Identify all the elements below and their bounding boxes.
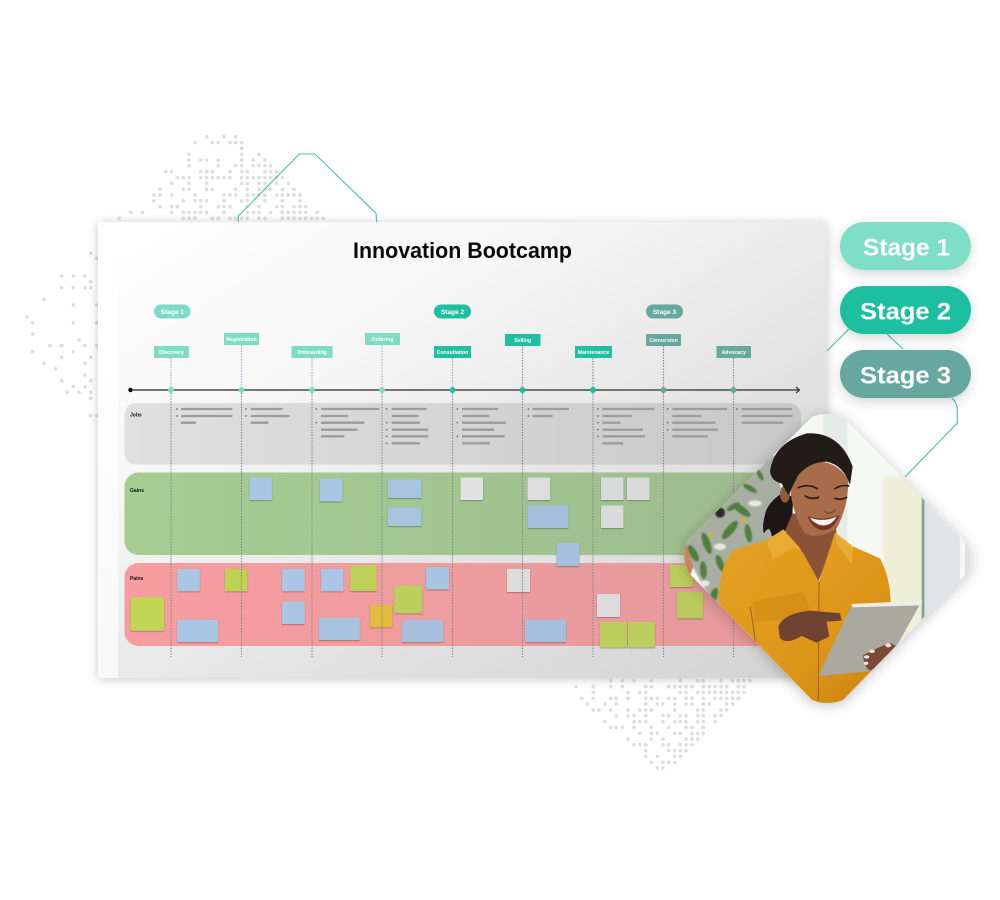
journey step labels: Onboarding xyxy=(297,350,327,356)
row: Gains xyxy=(124,472,784,555)
pill: Stage 3 xyxy=(840,350,971,398)
small stage pills xyxy=(154,304,683,318)
shirt xyxy=(718,529,897,703)
row: Pains: Pains xyxy=(130,576,144,582)
timeline drop lines xyxy=(171,345,734,657)
journey step labels: Discovery xyxy=(159,350,184,356)
dot pattern: left xyxy=(27,253,97,416)
hands xyxy=(778,611,842,643)
neck xyxy=(785,513,837,582)
sticky notes: Gains xyxy=(249,478,650,566)
small stage pills: Stage 2 xyxy=(441,309,464,316)
shirt collar xyxy=(767,529,802,559)
journey step labels: Ordering xyxy=(372,337,393,343)
connector lines: right side xyxy=(827,329,957,477)
title: Innovation Bootcamp xyxy=(353,238,572,263)
connector line: top hexagon outline xyxy=(238,154,377,222)
journey step labels: Conversion xyxy=(649,338,678,344)
row: Gains: Gains xyxy=(130,488,144,494)
small stage pills: Stage 3 xyxy=(653,309,676,316)
board background xyxy=(98,222,827,678)
ponytail xyxy=(763,493,793,537)
face xyxy=(790,462,848,536)
pill: Stage 1: Stage 1 xyxy=(863,234,950,262)
board left edge highlight xyxy=(98,222,118,678)
journey step labels xyxy=(154,333,751,358)
window background xyxy=(684,414,820,667)
journey step labels: Registration xyxy=(226,337,257,343)
journey step labels: Consultation xyxy=(437,350,468,356)
dot pattern: upper left xyxy=(119,137,323,218)
row: Pains xyxy=(124,563,784,646)
hair xyxy=(770,433,853,495)
pill: Stage 3: Stage 3 xyxy=(860,362,951,390)
journey step labels: Advocacy xyxy=(721,350,746,356)
job bullet text lines xyxy=(177,409,793,443)
timeline axis with arrow xyxy=(128,387,800,393)
pill: Stage 2: Stage 2 xyxy=(860,298,951,326)
small stage pills: Stage 1 xyxy=(161,309,184,316)
row: Jobs: Jobs xyxy=(130,412,142,418)
facial features xyxy=(798,486,849,513)
row: Jobs xyxy=(124,403,801,464)
tablet xyxy=(818,601,922,676)
dot pattern: bottom xyxy=(576,681,750,768)
photo: woman using a tablet in a diamond frame xyxy=(670,400,980,710)
journey step labels: Selling xyxy=(514,338,531,344)
panel: Innovation Bootcamp board xyxy=(98,222,827,678)
shirt pocket and sleeve folds xyxy=(750,582,819,702)
pill: Stage 1 xyxy=(840,222,971,270)
sticky notes: Pains xyxy=(131,565,703,648)
journey step labels: Maintenance xyxy=(578,350,609,356)
pill: Stage 2 xyxy=(840,286,971,334)
plant foliage xyxy=(684,454,782,610)
